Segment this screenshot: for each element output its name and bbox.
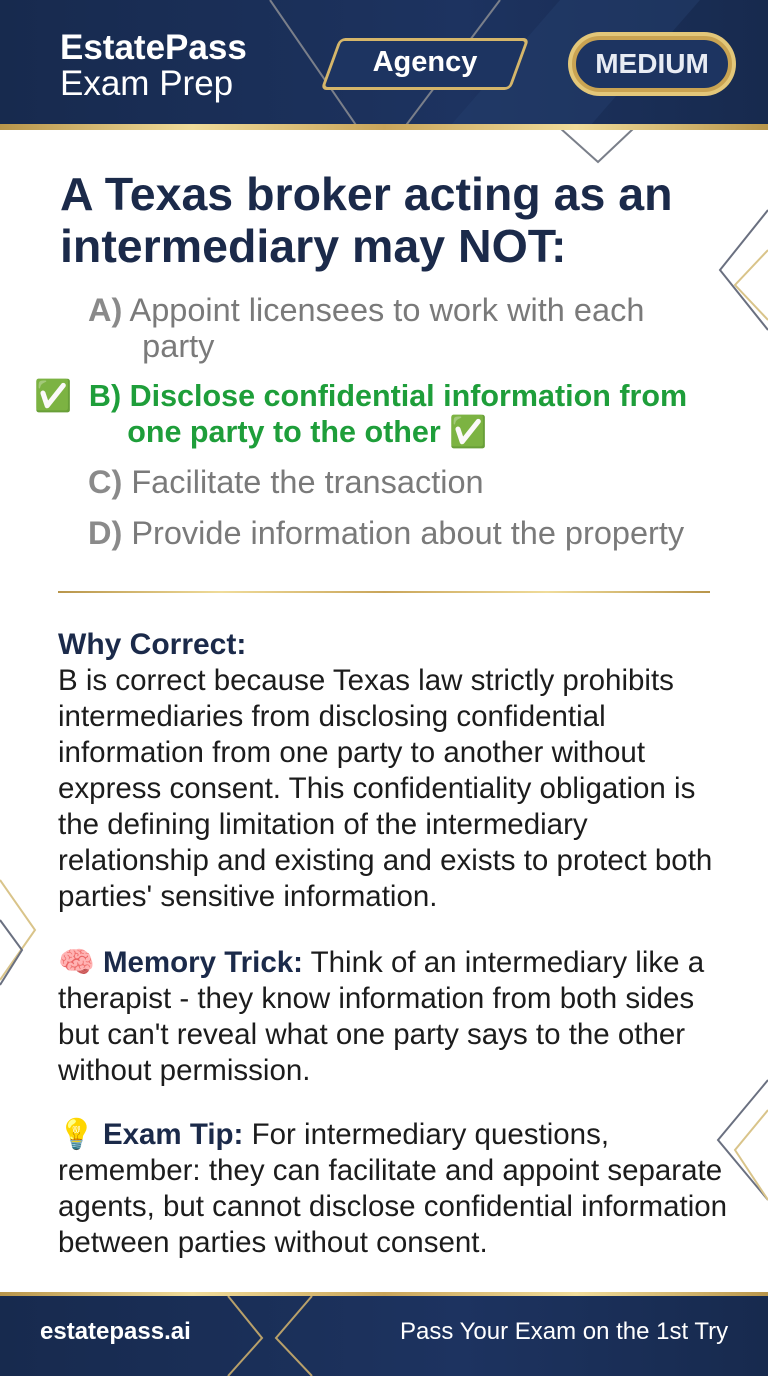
text: ✅ B) Disclose confidential information from: [34, 379, 687, 413]
title: [60, 168, 672, 272]
why correct: B is correct because Texas law strictly prohibits: [58, 664, 674, 697]
footer: [0, 1292, 768, 1298]
exam tip: agents, but cannot disclose confidential information: [58, 1190, 727, 1223]
options: party: [142, 328, 214, 364]
why correct: relationship and existing and exists to protect both: [58, 844, 712, 877]
text: C) Facilitate the transaction: [88, 464, 484, 500]
memory trick: therapist - they know information from both sides: [58, 982, 694, 1015]
why correct: parties' sensitive information.: [58, 880, 437, 913]
text: one party to the other ✅: [127, 415, 487, 449]
memory trick: without permission.: [58, 1054, 310, 1087]
badge: MEDIUM: [572, 36, 732, 92]
text: estatepass.ai: [40, 1318, 191, 1345]
text: Pass Your Exam on the 1st Try: [400, 1318, 728, 1345]
title: intermediary may NOT:: [60, 220, 567, 272]
why correct: information from one party to another without: [58, 736, 645, 769]
memory trick: 🧠 Memory Trick: Think of an intermediary like a: [58, 946, 704, 979]
text: D) Provide information about the property: [88, 515, 684, 551]
brand: EstatePass: [60, 28, 247, 67]
why correct: Why Correct:: [58, 628, 246, 661]
why correct: the defining limitation of the intermediary: [58, 808, 588, 841]
why correct: express consent. This confidentiality obligation is: [58, 772, 695, 805]
badge: Agency: [321, 38, 529, 90]
exam tip: between parties without consent.: [58, 1226, 488, 1259]
divider: [58, 591, 710, 593]
brand: Exam Prep: [60, 64, 233, 103]
exam tip: remember: they can facilitate and appoint separate: [58, 1154, 722, 1187]
exam tip: 💡 Exam Tip: For intermediary questions,: [58, 1118, 609, 1151]
exam tip: [58, 1118, 727, 1259]
options: A) Appoint licensees to work with each: [88, 292, 644, 328]
options: [88, 292, 644, 364]
title: A Texas broker acting as an: [60, 168, 672, 220]
why correct: intermediaries from disclosing confidential: [58, 700, 606, 733]
header: [0, 0, 768, 126]
why correct: [58, 628, 712, 913]
badge: MEDIUM: MEDIUM: [595, 48, 709, 79]
memory trick: [58, 946, 704, 1087]
header: Agency: [373, 46, 477, 78]
brand: [60, 28, 247, 103]
memory trick: but can't reveal what one party says to the other: [58, 1018, 685, 1051]
